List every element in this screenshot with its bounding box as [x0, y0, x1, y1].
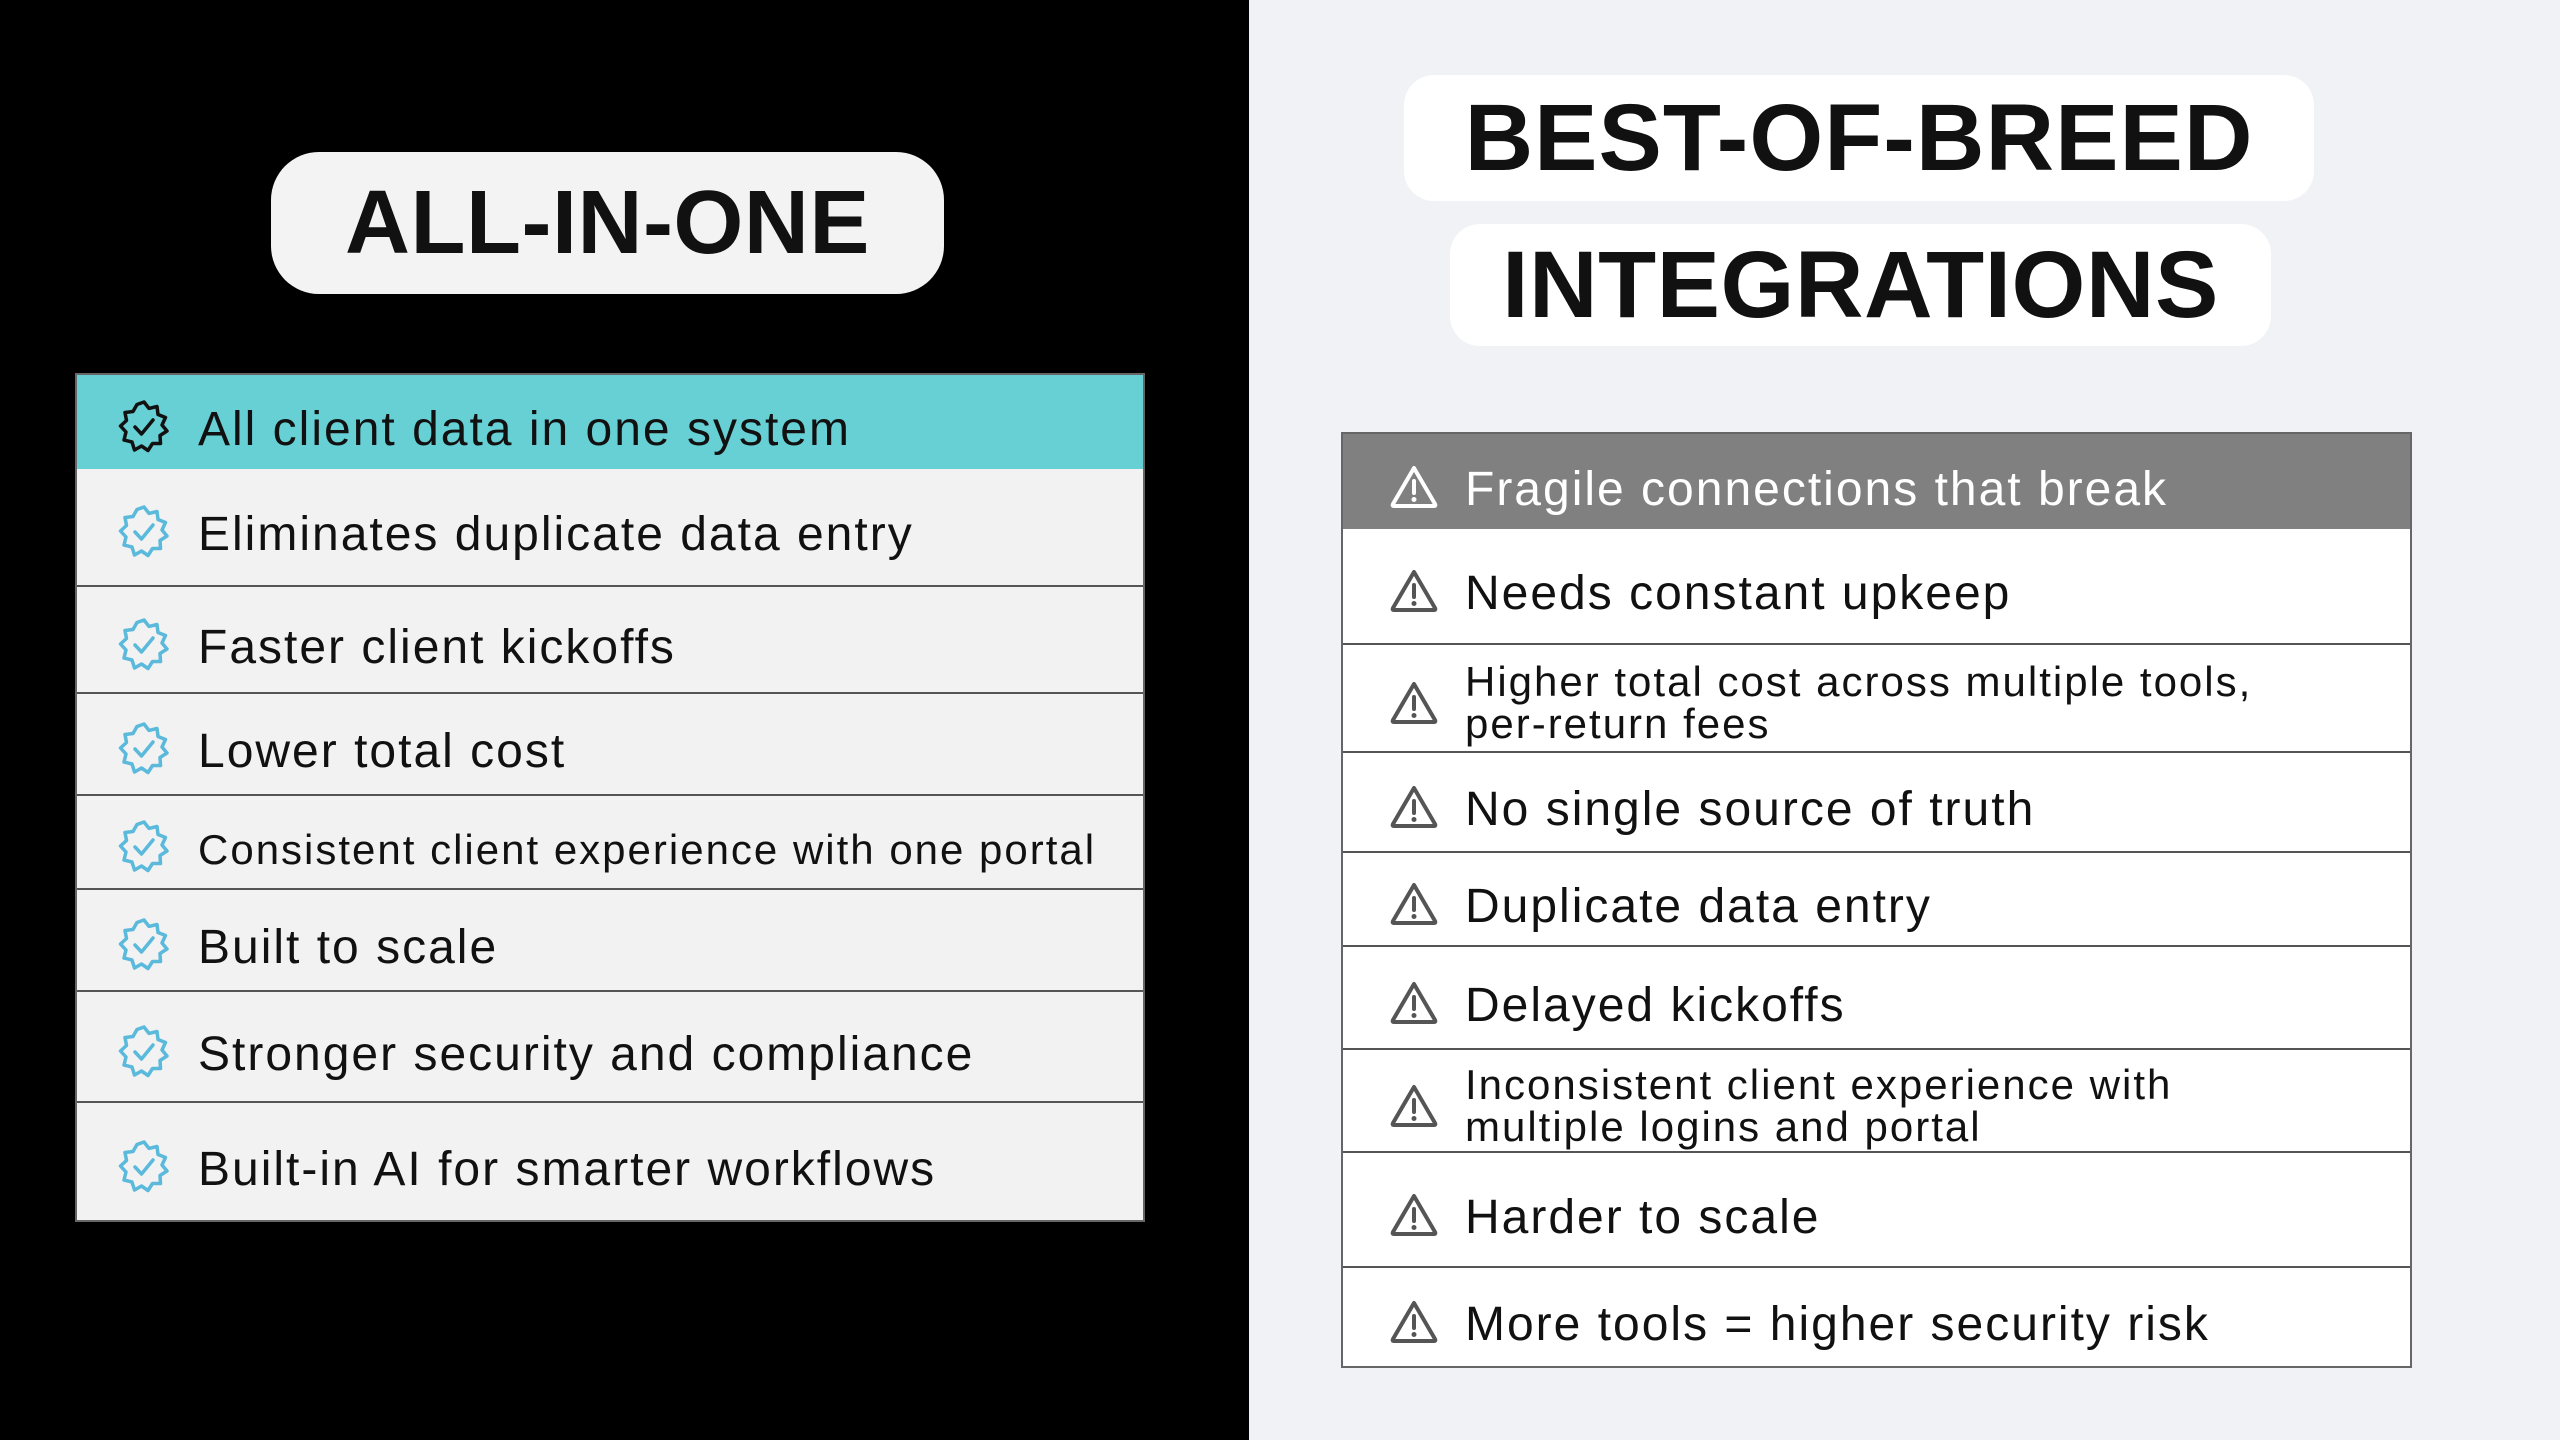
row: consistent experience: Consistent client experience with one portal: [198, 826, 1096, 873]
row: security risk: [1343, 1266, 2410, 1366]
row: built-in AI: [77, 1101, 1143, 1220]
row: consistent experience: [77, 794, 1143, 888]
row: faster kickoffs: Faster client kickoffs: [198, 620, 676, 674]
title: all-in-one: [271, 152, 944, 294]
title: all-in-one: ALL-IN-ONE: [345, 172, 870, 272]
row: stronger security: [77, 990, 1143, 1101]
row: harder to scale: [1343, 1151, 2410, 1266]
row: lower total cost: Lower total cost: [198, 725, 566, 778]
row: faster kickoffs: [77, 585, 1143, 692]
title: integrations: INTEGRATIONS: [1502, 232, 2219, 338]
row: eliminates duplicate: [77, 469, 1143, 585]
row: lower total cost: [77, 692, 1143, 794]
title: best-of-breed: BEST-OF-BREED: [1465, 84, 2253, 190]
row: built to scale: [77, 888, 1143, 990]
row: inconsistent experience: Inconsistent client experience with: [1465, 1060, 2172, 1108]
row: higher total cost: Higher total cost across multiple tools,: [1465, 658, 2252, 705]
row: eliminates duplicate: Eliminates duplicate data entry: [198, 508, 914, 561]
row: built-in AI: Built-in AI for smarter workflows: [198, 1142, 936, 1196]
row: no single source: No single source of truth: [1465, 783, 2035, 836]
row: higher total cost: per-return fees: [1465, 700, 1770, 747]
row: built to scale: Built to scale: [198, 921, 498, 974]
row: inconsistent experience: multiple logins and portal: [1465, 1102, 1982, 1150]
row: constant upkeep: Needs constant upkeep: [1465, 567, 2011, 620]
header row: all client data: All client data in one system: [198, 403, 851, 456]
header row: fragile connections: Fragile connections that break: [1465, 462, 2168, 516]
row: no single source: [1343, 751, 2410, 851]
row: higher total cost: [1343, 643, 2410, 751]
row: inconsistent experience: [1343, 1048, 2410, 1151]
row: duplicate data entry: Duplicate data entry: [1465, 880, 1932, 933]
row: harder to scale: Harder to scale: [1465, 1190, 1820, 1244]
row: duplicate data entry: [1343, 851, 2410, 945]
row: delayed kickoffs: Delayed kickoffs: [1465, 978, 1846, 1032]
header row: all client data: [77, 375, 1143, 469]
panel: best-of-breed drawbacks: [1341, 432, 2412, 1368]
row: delayed kickoffs: [1343, 945, 2410, 1048]
row: constant upkeep: [1343, 529, 2410, 643]
row: security risk: More tools = higher security risk: [1465, 1298, 2210, 1351]
row: stronger security: Stronger security and compliance: [198, 1028, 974, 1080]
left background: [0, 0, 1249, 1440]
panel: all-in-one benefits: [75, 373, 1145, 1222]
header row: fragile connections: [1343, 434, 2410, 529]
